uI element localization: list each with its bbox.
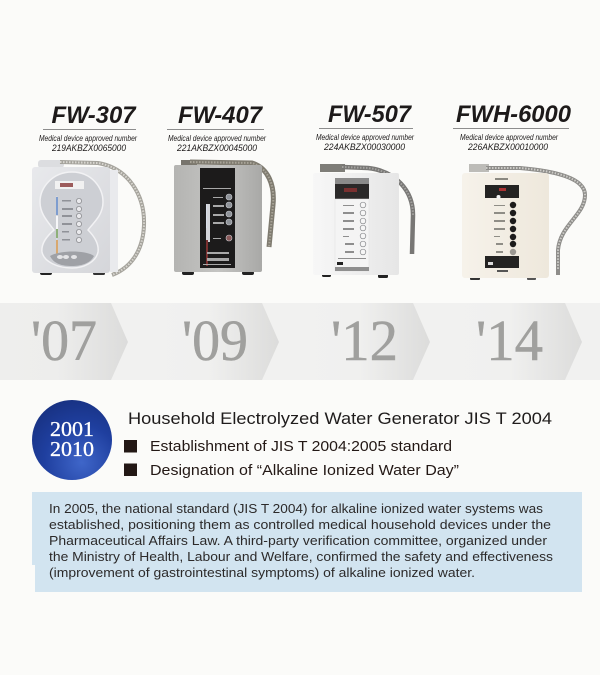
device: FW-407 water generator [174,160,273,275]
bullet: JIS standard: Establishment of JIS T 2004:2005 standard [150,438,452,455]
model heading: FWH-6000 [453,101,572,152]
year '14: '14 [476,308,543,373]
device: FWH-6000 water generator [462,164,585,280]
model heading: FW-407: Medical device approved number [168,134,266,143]
model heading: FW-307: 219AKBZX0065000 [51,143,126,153]
model heading: FWH-6000: FWH-6000 [456,101,572,128]
model heading: FW-407: FW-407 [178,102,264,129]
model heading: FW-507: 224AKBZX00030000 [323,142,405,152]
description text: the Ministry of Health, Labour and Welfare, confirmed the safety and effectiveness [49,549,554,564]
period badge 2001-2010: 2001 [50,417,94,441]
model heading: FW-307 [39,102,137,153]
model heading: FW-507: Medical device approved number [316,133,414,142]
description text: established, positioning them as controlled medical household devices under the [49,517,551,532]
chevron '14 [450,303,582,380]
model heading: FW-307: FW-307 [52,102,137,129]
chevron '12 [300,303,430,380]
chevron '09 [150,303,279,380]
model heading: FW-407: 221AKBZX00045000 [176,143,257,153]
model heading: FWH-6000: 226AKBZX00010000 [467,142,548,152]
description text: Pharmaceutical Affairs Law. A third-party verification committee, organized under [49,533,548,548]
description text: (improvement of gastrointestinal symptoms) of alkaline ionized water. [49,565,475,580]
year '07: '07 [31,308,97,373]
model heading: FWH-6000: Medical device approved number [460,133,558,142]
device: FW-307 water generator [32,160,144,275]
chevron '07 [0,303,128,380]
model heading: FW-307: Medical device approved number [39,134,137,143]
description text: In 2005, the national standard (JIS T 2004) for alkaline ionized water systems was [49,501,544,516]
period badge 2001-2010 [32,400,112,480]
model heading: FW-507: FW-507 [328,101,413,128]
model heading: FW-507 [316,101,414,152]
bullet: Alkaline Ionized Water Day: Designation of “Alkaline Ionized Water Day” [150,462,459,479]
device: FW-507 water generator [313,164,413,278]
description text [49,501,554,580]
year '09: '09 [182,308,248,373]
panel: description [32,492,582,592]
year '12: '12 [331,308,398,373]
model heading: FW-407 [167,102,266,153]
timeline band with year chevrons [0,303,600,380]
period badge 2001-2010: 2010 [50,437,94,461]
section heading: Household Electrolyzed Water Generator JIS T 2004 [128,409,552,428]
